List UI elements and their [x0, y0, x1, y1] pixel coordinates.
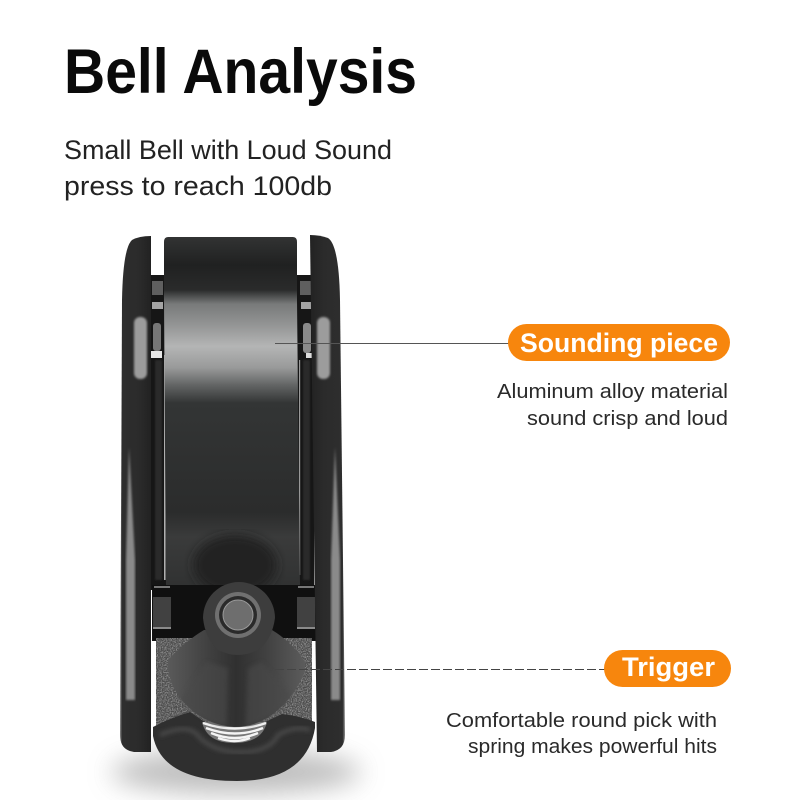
subtitle text: Small Bell with Loud Sound [64, 135, 392, 165]
leader line [275, 342, 510, 344]
sounding piece callout [275, 324, 730, 430]
description: sound crisp and loud [527, 408, 728, 430]
label pill: Trigger [622, 652, 715, 682]
ground shadow [111, 750, 361, 794]
description: spring makes powerful hits [468, 736, 717, 758]
trigger cone [168, 630, 305, 727]
title: Bell Analysis [64, 37, 417, 107]
sounding piece drum [164, 237, 300, 587]
dashed leader line [275, 668, 606, 670]
description: Comfortable round pick with [446, 710, 717, 732]
speckled base [156, 638, 312, 728]
subtitle text [64, 135, 392, 201]
trigger cap [203, 582, 275, 655]
drum lower shading [193, 535, 277, 595]
side brackets [149, 275, 317, 590]
left rim [120, 236, 151, 752]
spring cup [153, 712, 315, 781]
label pill [604, 650, 731, 687]
description [446, 710, 717, 758]
description [497, 381, 728, 430]
trigger callout [275, 650, 731, 758]
bell product illustration [111, 235, 361, 794]
right rim [310, 235, 345, 752]
spring [202, 722, 267, 743]
description: Aluminum alloy material [497, 381, 728, 403]
lower frame with speckled base [152, 585, 317, 781]
label pill: Sounding piece [520, 328, 718, 358]
subtitle text: press to reach 100db [64, 171, 332, 201]
